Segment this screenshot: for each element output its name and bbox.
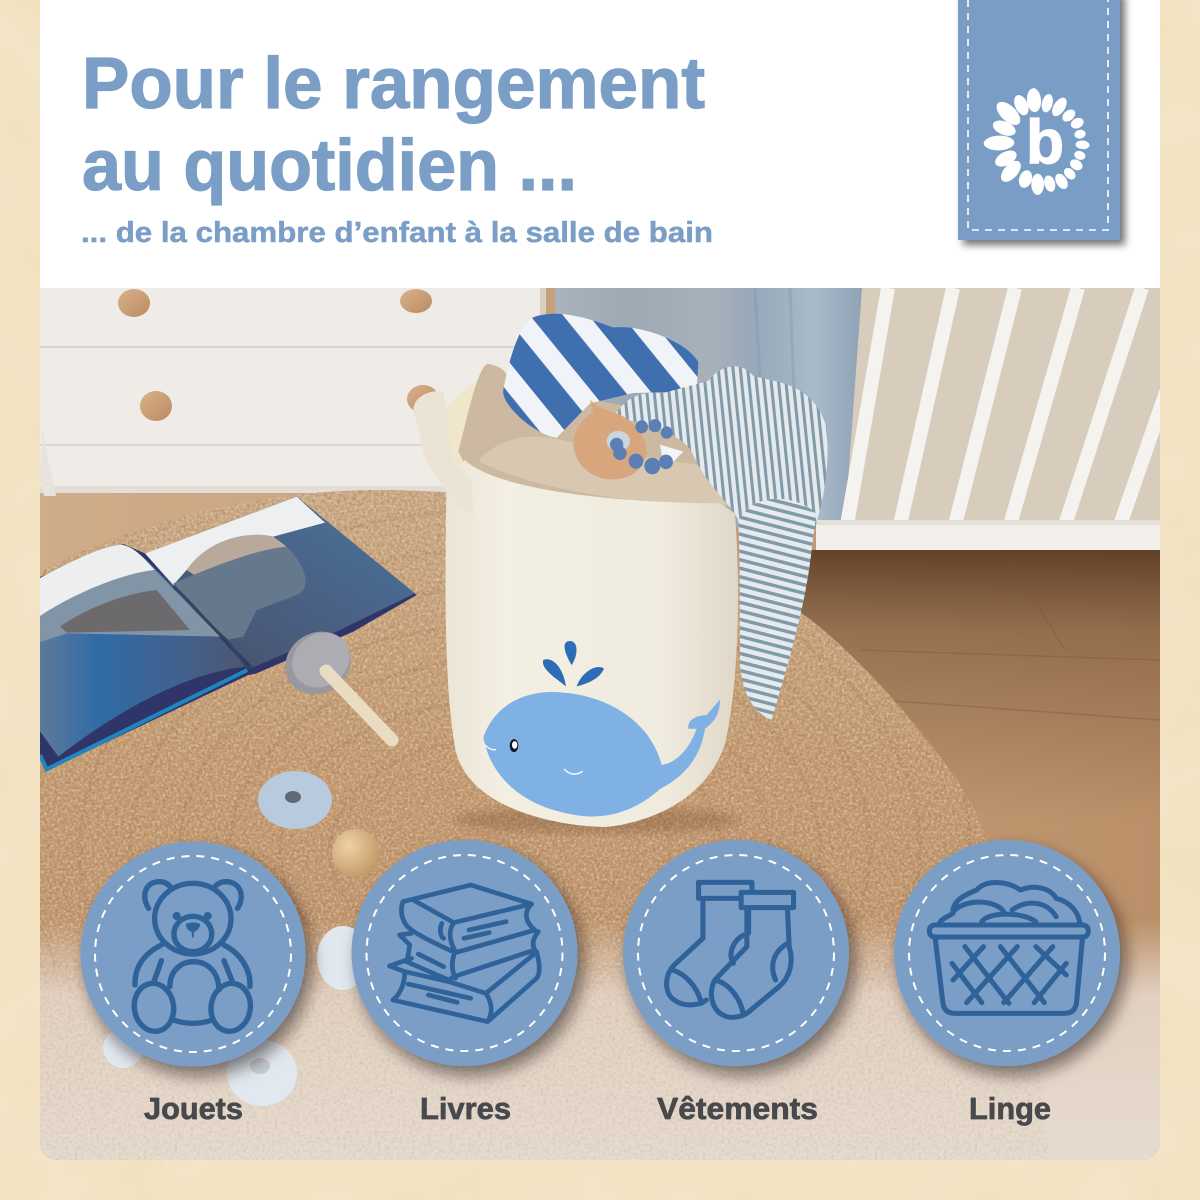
- badge: livres: [352, 840, 578, 1066]
- basket body: [445, 460, 738, 827]
- striped towel: [503, 314, 698, 438]
- basket: [413, 314, 828, 834]
- icon: laundry basket: [929, 882, 1088, 1013]
- whale spout: [543, 641, 604, 686]
- badge: vetements: [623, 840, 849, 1066]
- rug: [40, 490, 987, 1160]
- labels: Livres: [420, 1091, 511, 1126]
- labels: Linge: [969, 1091, 1051, 1126]
- wood ball: [332, 829, 380, 877]
- logo letter: b: [1026, 108, 1064, 177]
- wooden toy peg: [273, 619, 392, 740]
- icon: teddy bear: [131, 882, 253, 1034]
- icon: socks: [667, 882, 794, 1017]
- dresser: [40, 288, 546, 496]
- icon: flower logo: [983, 88, 1090, 195]
- labels: Jouets: [144, 1091, 243, 1126]
- badge: jouets: [80, 842, 306, 1066]
- dresser knobs: [118, 289, 439, 421]
- whale applique: [483, 692, 720, 817]
- light fade on bottom of photo: [40, 920, 1160, 1170]
- title: Pour le rangement: [82, 44, 705, 124]
- wooden teether: [573, 400, 673, 479]
- basket contents: [446, 382, 476, 466]
- white towel corner: [660, 445, 683, 462]
- handle: [413, 391, 473, 515]
- badge: linge: [894, 840, 1120, 1066]
- blue ring toy: [258, 771, 332, 829]
- crib: [816, 288, 1172, 550]
- floor: [40, 288, 1160, 1168]
- grey striped cloth: [613, 366, 828, 720]
- small white discs: [103, 926, 369, 1106]
- title: au quotidien ...: [82, 126, 577, 206]
- subtitle: ... de la chambre d’enfant à la salle de bain: [81, 217, 713, 249]
- panel: header: [40, 0, 1160, 289]
- light rug texture: [30, 960, 1070, 1170]
- title: [82, 44, 705, 206]
- labels: [144, 1091, 1051, 1126]
- brand tag: [958, 0, 1120, 240]
- panel: photo: [30, 288, 1172, 1190]
- book: [37, 497, 417, 771]
- icon: stack of books: [390, 885, 539, 1022]
- curtain: [555, 288, 862, 527]
- labels: Vêtements: [657, 1091, 818, 1126]
